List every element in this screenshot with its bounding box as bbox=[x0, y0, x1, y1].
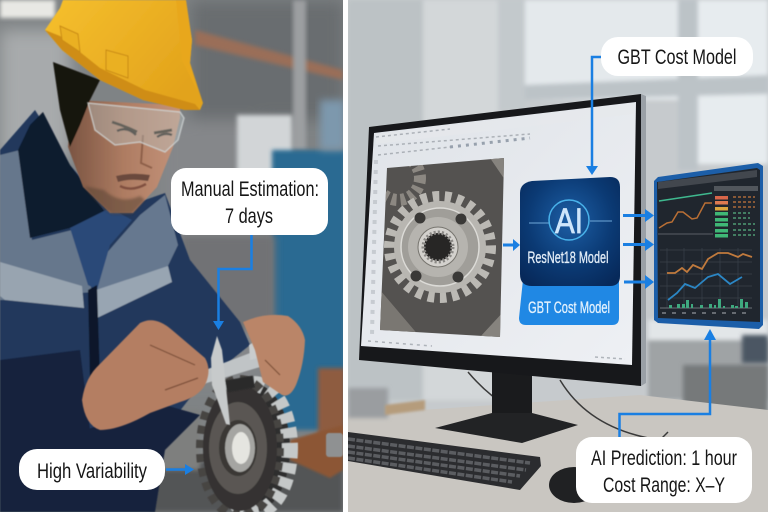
callout: high variability: High Variability bbox=[37, 460, 147, 483]
tablet top line chart bbox=[658, 193, 713, 234]
monitor bbox=[359, 94, 646, 386]
panel: AI prediction office scene bbox=[348, 0, 768, 512]
arrow: AI prediction callout to tablet bbox=[620, 329, 716, 437]
callout: high variability bbox=[19, 449, 165, 490]
panel: manual estimation photo bbox=[0, 0, 345, 512]
mouse bbox=[549, 467, 585, 503]
tablet dashboard bbox=[654, 163, 763, 329]
office background and window bbox=[348, 0, 768, 512]
keyboard bbox=[348, 432, 541, 490]
worker hands bbox=[82, 315, 305, 430]
AI ResNet18 model block: AI bbox=[555, 202, 583, 241]
AI ResNet18 model block: ResNet18 Model bbox=[528, 248, 608, 267]
worker jacket bbox=[0, 110, 250, 512]
GBT cost model block: GBT Cost Model bbox=[528, 298, 610, 317]
worker face bbox=[53, 62, 180, 214]
callout: AI prediction and cost range: Cost Range: X–Y bbox=[603, 474, 725, 497]
arrow: image to AI block bbox=[503, 239, 520, 251]
safety glasses bbox=[88, 103, 184, 152]
workshop background bbox=[0, 0, 345, 512]
gear photo on screen bbox=[376, 155, 508, 340]
gear being measured bbox=[202, 381, 290, 512]
arrow: GBT callout to AI block bbox=[586, 57, 602, 175]
tablet bottom chart bbox=[660, 248, 752, 313]
arrows: AI block to tablet bbox=[623, 209, 654, 289]
AI ResNet18 model block bbox=[520, 177, 620, 286]
callout: GBT cost model: GBT Cost Model bbox=[618, 46, 736, 69]
hard hat bbox=[45, 0, 203, 110]
callout: manual estimation 7 days: Manual Estimation: bbox=[181, 178, 319, 201]
monitor cables bbox=[468, 372, 668, 440]
callout arrow: manual estimation to caliper bbox=[213, 235, 252, 330]
callout: AI prediction and cost range bbox=[576, 437, 752, 503]
callout: manual estimation 7 days bbox=[171, 168, 328, 235]
tablet status bars bbox=[714, 186, 758, 238]
callout: manual estimation 7 days: 7 days bbox=[225, 205, 273, 228]
callout: GBT cost model bbox=[601, 37, 753, 76]
GBT cost model block bbox=[519, 281, 619, 325]
caliper bbox=[200, 336, 260, 425]
screen toolbar bbox=[368, 128, 625, 360]
monitor stand bbox=[435, 370, 578, 443]
arrow: high variability to gear bbox=[166, 464, 194, 475]
